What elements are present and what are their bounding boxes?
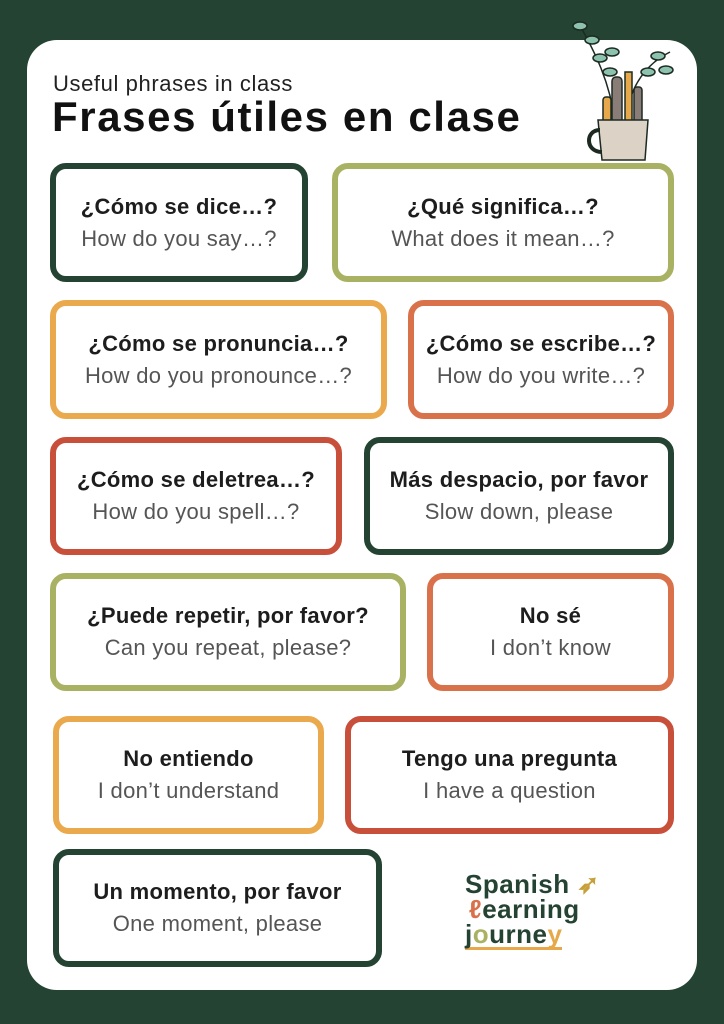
logo: journey <box>465 919 562 949</box>
box 8: I don’t know <box>490 635 611 660</box>
box 2 <box>332 163 674 282</box>
box 5: ¿Cómo se deletrea…? <box>77 467 315 492</box>
box 3: ¿Cómo se pronuncia…? <box>88 330 349 356</box>
box 7: Can you repeat, please? <box>105 635 351 660</box>
box 1 <box>50 163 308 282</box>
box 5 <box>50 437 342 555</box>
logo <box>464 869 600 950</box>
box 10: Tengo una pregunta <box>402 746 617 771</box>
icon: pencil mug with plant <box>572 21 674 161</box>
box 1: How do you say…? <box>81 226 277 250</box>
box 9: I don’t understand <box>98 778 279 803</box>
box 8: No sé <box>520 603 581 628</box>
title: Frases útiles en clase <box>52 93 521 140</box>
box 11 <box>53 849 382 967</box>
logo: Spanish ➶ <box>465 869 600 899</box>
box 4 <box>408 300 674 419</box>
subtitle: Useful phrases in class <box>53 71 293 96</box>
box 3 <box>50 300 387 419</box>
box 3: How do you pronounce…? <box>85 362 352 388</box>
box 8 <box>427 573 674 691</box>
box 9: No entiendo <box>123 746 254 771</box>
box 11: One moment, please <box>113 911 322 936</box>
box 6: Slow down, please <box>425 499 613 524</box>
box 10: I have a question <box>423 778 596 803</box>
box 4: ¿Cómo se escribe…? <box>426 330 656 356</box>
box 11: Un momento, por favor <box>93 879 342 904</box>
box 9 <box>53 716 324 834</box>
box 1: ¿Cómo se dice…? <box>81 194 277 218</box>
box 4: How do you write…? <box>437 362 645 388</box>
box 5: How do you spell…? <box>92 499 300 524</box>
logo: ℓearning <box>469 894 580 924</box>
box 7: ¿Puede repetir, por favor? <box>87 603 369 628</box>
box 2: What does it mean…? <box>391 226 615 250</box>
box 2: ¿Qué significa…? <box>407 194 599 218</box>
box 7 <box>50 573 406 691</box>
box 10 <box>345 716 674 834</box>
box 6: Más despacio, por favor <box>390 467 648 492</box>
box 6 <box>364 437 674 555</box>
